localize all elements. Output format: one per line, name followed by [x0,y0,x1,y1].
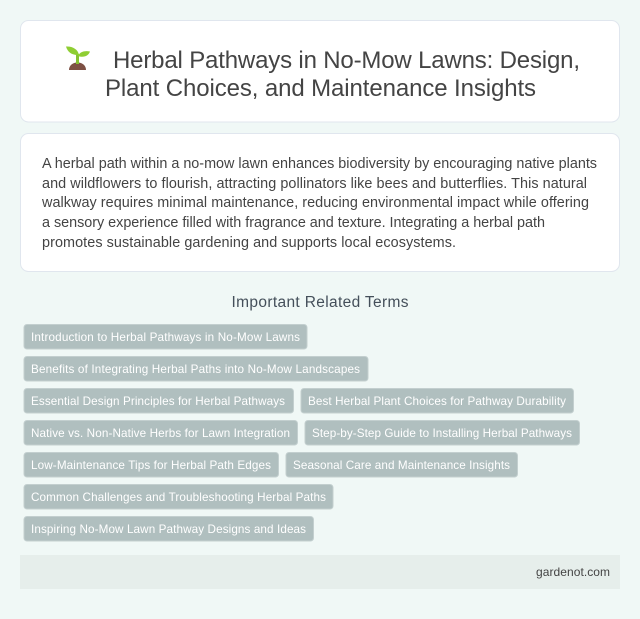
description text: promotes sustainable gardening and supports local ecosystems. [42,235,456,251]
tag 8: Seasonal Care and Maintenance Insights [293,459,510,472]
title text: Herbal Pathways in No-Mow Lawns: Design, [113,47,580,74]
tag 5: Native vs. Non-Native Herbs for Lawn Integration [31,427,290,440]
icon: sprout [66,46,90,70]
description text [41,156,597,251]
description text: a sensory experience filled with fragrance and texture. Integrating a herbal path [42,215,545,231]
tag 8 [286,452,518,477]
tag 10: Inspiring No-Mow Lawn Pathway Designs and Ideas [31,523,306,536]
footer bar [20,555,620,589]
description text: and wildflowers to flourish, attracting pollinators like bees and butterflies. This natural [42,176,587,192]
panel: title card [20,20,620,122]
tag 3 [24,388,294,413]
tag 3: Essential Design Principles for Herbal Pathways [31,395,285,408]
panel: description card [20,134,620,272]
tag 9 [24,484,333,509]
tag 6: Step-by-Step Guide to Installing Herbal Pathways [312,427,572,440]
tag 9: Common Challenges and Troubleshooting Herbal Paths [31,491,326,504]
tag 4 [301,388,574,413]
tag 6 [305,420,580,445]
title text [105,47,580,102]
heading: important related terms: Important Related Terms [232,294,409,311]
tag 2: Benefits of Integrating Herbal Paths into No-Mow Landscapes [31,363,360,376]
tag 1: Introduction to Herbal Pathways in No-Mow Lawns [31,331,300,344]
tag 7 [24,452,278,477]
description text: A herbal path within a no-mow lawn enhances biodiversity by encouraging native plants [42,156,597,172]
title text: Plant Choices, and Maintenance Insights [105,75,536,102]
tag 4: Best Herbal Plant Choices for Pathway Durability [308,395,566,408]
tag 10 [24,516,314,541]
tag 2 [24,356,368,381]
tag 7: Low-Maintenance Tips for Herbal Path Edges [31,459,271,472]
description text: walkway requires minimal maintenance, reducing environmental impact while offering [41,195,589,211]
tag 5 [24,420,298,445]
term tags [24,324,580,541]
tag 1 [24,324,307,349]
footer source text: gardenot.com [536,565,610,579]
